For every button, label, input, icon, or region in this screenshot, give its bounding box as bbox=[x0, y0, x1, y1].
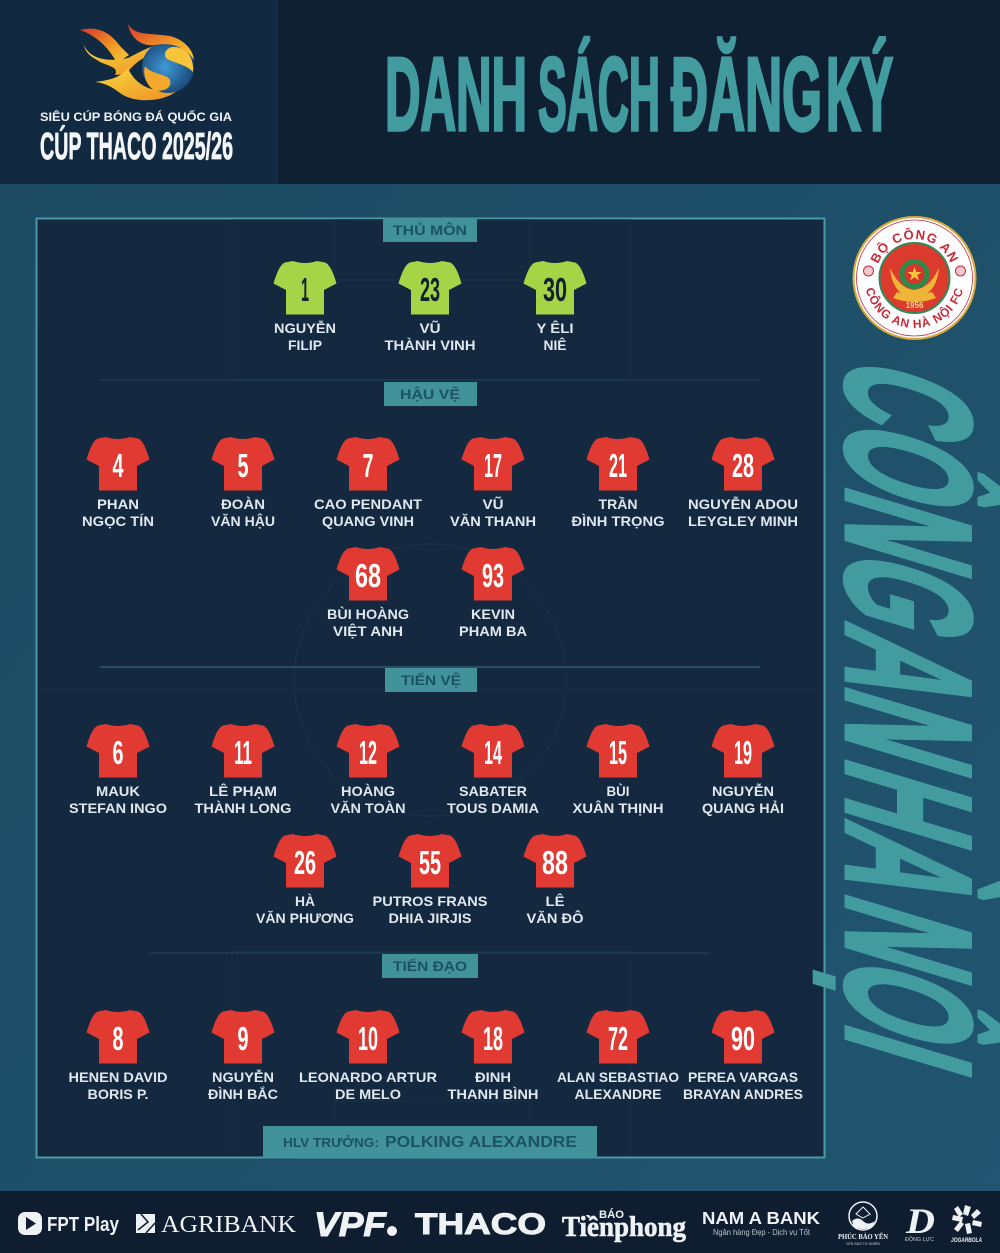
player: 9 Nguyễn Đình Bắc: 9 bbox=[238, 1020, 248, 1057]
player: 72 Alan Sebastiao Alexandre: ALEXANDRE bbox=[574, 1086, 662, 1102]
player: 88 Lê Văn Đô: VĂN ĐÔ bbox=[526, 909, 584, 926]
player: 18 Đinh Thanh Bình: ĐINH bbox=[475, 1069, 511, 1085]
icon: tournament logo bbox=[80, 24, 194, 100]
logo: Nam A Bank bbox=[702, 1208, 820, 1237]
logo subtitle: SIÊU CÚP BÓNG ĐÁ QUỐC GIA bbox=[40, 109, 232, 124]
player: 26 Hà Văn Phương: VĂN PHƯƠNG bbox=[256, 910, 354, 926]
player: 90 Perea Vargas Brayan Andres: 90 bbox=[731, 1020, 755, 1057]
title: SÁCH bbox=[538, 37, 660, 153]
logo: FPT Play: FPT Play bbox=[47, 1214, 120, 1236]
player: 30 Y Êli Niê: 30 bbox=[543, 271, 567, 308]
player: 8 Henen David Boris P. bbox=[68, 1010, 168, 1102]
player: 11 Lê Phạm Thành Long: THÀNH LONG bbox=[194, 800, 292, 816]
header: left logo panel bbox=[0, 0, 278, 184]
logo: Phúc Bảo Yến bbox=[838, 1202, 888, 1246]
player: 5 Đoàn Văn Hậu: 5 bbox=[238, 447, 248, 484]
icon: club badge: 1956 bbox=[906, 301, 924, 310]
logo: Động Lực: D bbox=[905, 1201, 935, 1241]
player: 26 Hà Văn Phương: HÀ bbox=[295, 893, 315, 909]
logo: Nam A Bank: NAM A BANK bbox=[702, 1208, 820, 1228]
title: DANH bbox=[385, 37, 527, 153]
player: 6 Mauk Stefan Ingo: 6 bbox=[112, 734, 124, 771]
player: 6 Mauk Stefan Ingo: STEFAN INGO bbox=[69, 800, 167, 816]
player: 19 Nguyễn Quang Hải: QUANG HẢI bbox=[702, 800, 784, 816]
heading: midfielders: TIẾN VỆ bbox=[401, 671, 461, 688]
player: 10 Leonardo Artur De Melo bbox=[299, 1010, 437, 1102]
player: 68 Bùi Hoàng Việt Anh: BÙI HOÀNG bbox=[327, 605, 409, 622]
player: 26 Hà Văn Phương: 26 bbox=[294, 844, 316, 881]
footer: sponsors bbox=[0, 1191, 1000, 1253]
player: 21 Trần Đình Trọng: 21 bbox=[609, 447, 627, 484]
player: 30 Y Êli Niê: NIÊ bbox=[544, 336, 566, 353]
text: KÝ bbox=[826, 37, 893, 153]
player: 5 Đoàn Văn Hậu: VĂN HẬU bbox=[211, 512, 275, 529]
player: 18 Đinh Thanh Bình: THANH BÌNH bbox=[448, 1086, 538, 1102]
player: 15 Bùi Xuân Thịnh: 15 bbox=[609, 734, 627, 771]
player: 23 Vũ Thành Vinh: THÀNH VINH bbox=[384, 337, 476, 353]
player: 1 Nguyễn Filip: NGUYỄN bbox=[274, 320, 336, 336]
player: 23 Vũ Thành Vinh bbox=[384, 261, 476, 353]
player: 5 Đoàn Văn Hậu bbox=[211, 437, 275, 529]
player: 17 Vũ Văn Thanh bbox=[450, 437, 536, 529]
logo: Jogarbola bbox=[951, 1205, 982, 1244]
icon: club badge: CÔNG AN HÀ NỘI FC bbox=[866, 288, 962, 328]
heading: goalkeepers bbox=[383, 218, 477, 242]
player: 14 Sabater Tous Damia: SABATER bbox=[459, 783, 527, 799]
player: 8 Henen David Boris P.: HENEN DAVID bbox=[68, 1069, 168, 1085]
player: 17 Vũ Văn Thanh: VŨ bbox=[482, 495, 504, 512]
player: 90 Perea Vargas Brayan Andres bbox=[683, 1010, 803, 1102]
player: 11 Lê Phạm Thành Long: 11 bbox=[234, 734, 252, 771]
player: 17 Vũ Văn Thanh: VĂN THANH bbox=[450, 513, 536, 529]
player: 15 Bùi Xuân Thịnh: XUÂN THỊNH bbox=[572, 799, 664, 816]
player: 23 Vũ Thành Vinh: 23 bbox=[420, 271, 440, 308]
player: 19 Nguyễn Quang Hải: NGUYỄN bbox=[712, 783, 774, 799]
player: 4 Phan Ngọc Tín: PHAN bbox=[97, 496, 139, 512]
player: 1 Nguyễn Filip: FILIP bbox=[288, 337, 322, 353]
panel: pitch bbox=[36, 218, 824, 1158]
logo: Động Lực: ĐỘNG LỰC bbox=[905, 1236, 934, 1243]
logo: Phúc Bảo Yến: YẾN SÀO TỰ NHIÊN bbox=[846, 1241, 880, 1246]
player: 55 Putros Frans Dhia Jirjis bbox=[372, 834, 488, 926]
player: 30 Y Êli Niê bbox=[524, 261, 586, 353]
player: 14 Sabater Tous Damia: TOUS DAMIA bbox=[447, 800, 539, 816]
player: 93 Kevin Pham Ba: KEVIN bbox=[471, 606, 515, 622]
player: 93 Kevin Pham Ba: 93 bbox=[482, 557, 504, 594]
player: 55 Putros Frans Dhia Jirjis: PUTROS FRANS bbox=[372, 893, 488, 909]
player: 8 Henen David Boris P.: BORIS P. bbox=[88, 1086, 148, 1102]
player: 9 Nguyễn Đình Bắc: ĐÌNH BẮC bbox=[208, 1085, 278, 1102]
player: 90 Perea Vargas Brayan Andres: BRAYAN ANDRES bbox=[683, 1086, 803, 1102]
player: 72 Alan Sebastiao Alexandre: ALAN SEBASTIAO bbox=[557, 1069, 679, 1085]
icon: club badge bbox=[852, 216, 976, 340]
header: right title panel bbox=[277, 0, 1000, 184]
heading: midfielders bbox=[385, 668, 477, 692]
player: 28 Nguyễn Adou Leygley Minh: 28 bbox=[732, 447, 754, 484]
player: 10 Leonardo Artur De Melo: LEONARDO ARTUR bbox=[299, 1069, 437, 1085]
player: 88 Lê Văn Đô bbox=[524, 834, 586, 926]
player: 6 Mauk Stefan Ingo: MAUK bbox=[96, 783, 140, 799]
player: 21 Trần Đình Trọng: ĐÌNH TRỌNG bbox=[572, 513, 665, 529]
player: 21 Trần Đình Trọng: TRẦN bbox=[598, 496, 638, 512]
coach label: POLKING ALEXANDRE bbox=[385, 1134, 577, 1151]
player: 93 Kevin Pham Ba: PHAM BA bbox=[459, 623, 527, 639]
player: 4 Phan Ngọc Tín: 4 bbox=[112, 447, 124, 484]
player: 7 Cao Pendant Quang Vinh: QUANG VINH bbox=[322, 513, 414, 529]
heading: goalkeepers: THỦ MÔN bbox=[393, 221, 467, 238]
logo: Jogarbola: JOGARBOLA bbox=[951, 1237, 982, 1244]
player: 4 Phan Ngọc Tín bbox=[82, 437, 154, 529]
player: 7 Cao Pendant Quang Vinh bbox=[314, 437, 422, 529]
heading: defenders bbox=[384, 382, 477, 406]
player: 28 Nguyễn Adou Leygley Minh: LEYGLEY MINH bbox=[688, 513, 798, 529]
player: 6 Mauk Stefan Ingo bbox=[69, 724, 167, 816]
player: 7 Cao Pendant Quang Vinh: 7 bbox=[362, 447, 374, 484]
player: 1 Nguyễn Filip: 1 bbox=[301, 271, 309, 308]
player: 9 Nguyễn Đình Bắc: NGUYỄN bbox=[212, 1069, 274, 1085]
title: ĐĂNG bbox=[671, 37, 822, 153]
player: 30 Y Êli Niê: Y ÊLI bbox=[536, 319, 574, 336]
player: 26 Hà Văn Phương bbox=[256, 834, 354, 926]
player: 68 Bùi Hoàng Việt Anh: VIỆT ANH bbox=[333, 622, 403, 639]
player: 88 Lê Văn Đô: LÊ bbox=[546, 892, 564, 909]
logo: THACO: THACO bbox=[415, 1208, 546, 1241]
player: 28 Nguyễn Adou Leygley Minh: NGUYỄN ADOU bbox=[688, 496, 798, 512]
player: 8 Henen David Boris P.: 8 bbox=[112, 1020, 124, 1057]
player: 15 Bùi Xuân Thịnh: BÙI bbox=[606, 782, 630, 799]
heading: forwards: TIẾN ĐẠO bbox=[393, 958, 467, 974]
player: 14 Sabater Tous Damia bbox=[447, 724, 539, 816]
player: 19 Nguyễn Quang Hải: 19 bbox=[734, 734, 752, 771]
coach label bbox=[263, 1126, 597, 1158]
player: 23 Vũ Thành Vinh: VŨ bbox=[420, 319, 440, 336]
player: 19 Nguyễn Quang Hải bbox=[702, 724, 784, 816]
logo: VPF: VPF bbox=[314, 1206, 387, 1244]
player: 93 Kevin Pham Ba bbox=[459, 547, 527, 639]
player: 9 Nguyễn Đình Bắc bbox=[208, 1010, 278, 1102]
player: 11 Lê Phạm Thành Long: LÊ PHẠM bbox=[209, 782, 277, 799]
player: 12 Hoàng Văn Toàn: HOÀNG bbox=[341, 783, 395, 799]
player: 12 Hoàng Văn Toàn: 12 bbox=[359, 734, 377, 771]
heading: defenders: HẬU VỆ bbox=[400, 385, 460, 402]
player: 18 Đinh Thanh Bình bbox=[448, 1010, 538, 1102]
player: 88 Lê Văn Đô: 88 bbox=[542, 844, 568, 881]
icon: club badge: BỘ CÔNG AN bbox=[870, 228, 958, 264]
player: 15 Bùi Xuân Thịnh bbox=[572, 724, 664, 816]
player: 11 Lê Phạm Thành Long bbox=[194, 724, 292, 816]
logo: Phúc Bảo Yến: PHÚC BẢO YẾN bbox=[838, 1233, 888, 1241]
player: 72 Alan Sebastiao Alexandre: 72 bbox=[608, 1020, 628, 1057]
player: 55 Putros Frans Dhia Jirjis: 55 bbox=[419, 844, 441, 881]
player: 17 Vũ Văn Thanh: 17 bbox=[484, 447, 502, 484]
player: 72 Alan Sebastiao Alexandre bbox=[557, 1010, 679, 1102]
logo: Nam A Bank: Ngân hàng Đẹp - Dịch vụ Tốt bbox=[713, 1228, 811, 1237]
player: 10 Leonardo Artur De Melo: DE MELO bbox=[335, 1086, 401, 1102]
logo: Tiền Phong: BÁO bbox=[599, 1208, 624, 1221]
player: 1 Nguyễn Filip bbox=[274, 261, 336, 353]
player: 12 Hoàng Văn Toàn: VĂN TOÀN bbox=[330, 800, 406, 816]
heading: forwards bbox=[382, 954, 478, 978]
player: 4 Phan Ngọc Tín: NGỌC TÍN bbox=[82, 513, 154, 529]
player: 12 Hoàng Văn Toàn bbox=[330, 724, 406, 816]
player: 28 Nguyễn Adou Leygley Minh bbox=[688, 437, 798, 529]
icon: club badge: ★ bbox=[907, 266, 922, 283]
player: 18 Đinh Thanh Bình: 18 bbox=[483, 1020, 503, 1057]
logo: FPT Play bbox=[18, 1212, 120, 1236]
logo title: CÚP THACO 2025/26 bbox=[40, 124, 233, 168]
player: 14 Sabater Tous Damia: 14 bbox=[484, 734, 502, 771]
logo: Agribank: AGRIBANK bbox=[161, 1212, 297, 1238]
logo: Tiền Phong: Tiềnphong bbox=[562, 1212, 686, 1243]
player: 5 Đoàn Văn Hậu: ĐOÀN bbox=[221, 496, 265, 512]
player: 68 Bùi Hoàng Việt Anh bbox=[327, 547, 409, 639]
player: 21 Trần Đình Trọng bbox=[572, 437, 665, 529]
title bbox=[385, 37, 893, 153]
player: 7 Cao Pendant Quang Vinh: CAO PENDANT bbox=[314, 496, 422, 512]
player: 10 Leonardo Artur De Melo: 10 bbox=[358, 1020, 378, 1057]
player: 90 Perea Vargas Brayan Andres: PEREA VARGAS bbox=[688, 1069, 798, 1085]
player: 68 Bùi Hoàng Việt Anh: 68 bbox=[355, 557, 381, 594]
coach label: HLV TRƯỞNG: bbox=[283, 1135, 379, 1150]
player: 55 Putros Frans Dhia Jirjis: DHIA JIRJIS bbox=[388, 910, 472, 926]
